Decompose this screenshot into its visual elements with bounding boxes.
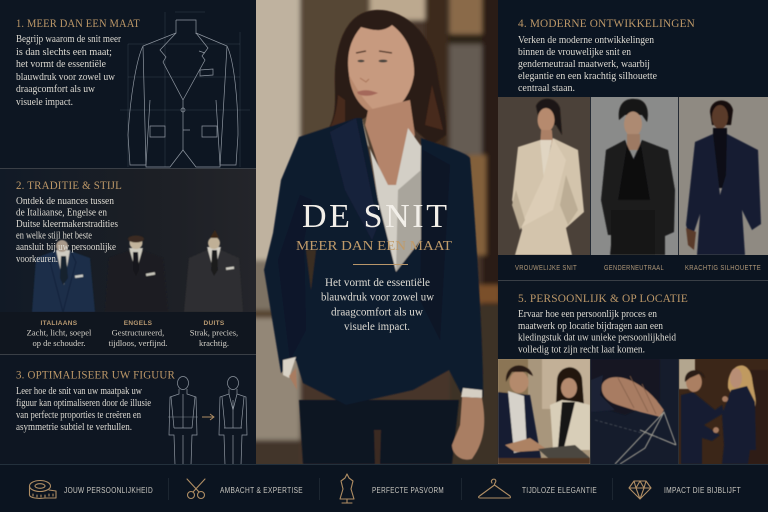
panel: 1 meer dan een maat xyxy=(0,0,256,169)
shirt xyxy=(362,118,421,272)
text block xyxy=(16,33,121,108)
text block: van perfecte proporties te creëren en xyxy=(16,409,141,421)
label: TIJDLOZE ELEGANTIE xyxy=(522,486,597,495)
arrow xyxy=(202,414,214,420)
intro text: blauwdruk voor zowel uw xyxy=(321,290,434,304)
photo background xyxy=(250,0,506,480)
icon: diamond xyxy=(629,481,651,499)
jacket xyxy=(264,118,483,405)
caption: duits xyxy=(190,320,238,348)
icon: hanger xyxy=(479,479,510,498)
text block: volledig tot zijn recht laat komen. xyxy=(518,344,645,356)
panel: 3 optimaliseer uw figuur xyxy=(0,355,256,465)
trousers xyxy=(299,400,459,464)
caption: engels: Gestructureerd, xyxy=(112,328,164,338)
central portrait photo xyxy=(250,0,506,480)
label: JOUW PERSOONLIJKHEID xyxy=(64,486,153,495)
panel: 5 persoonlijk en op locatie xyxy=(498,280,768,464)
caption: italiaans: op de schouder. xyxy=(32,338,86,348)
intro text: visuele impact. xyxy=(344,319,410,333)
caption: italiaans: Zacht, licht, soepel xyxy=(27,328,92,338)
text block: aansluit bij uw persoonlijke xyxy=(16,241,116,253)
text block: draagcomfort als uw xyxy=(16,83,95,95)
suit: italiaans xyxy=(32,240,95,312)
caption: italiaans: ITALIAANS xyxy=(41,320,78,327)
photo caption: VROUWELIJKE SNIT xyxy=(515,265,577,272)
heading: 1. MEER DAN EEN MAAT xyxy=(16,16,140,30)
text block: is dan slechts een maat; xyxy=(16,46,112,58)
suit: engels xyxy=(105,236,168,312)
heading: 4. MODERNE ONTWIKKELINGEN xyxy=(518,16,695,30)
text block: binnen de vrouwelijke snit en xyxy=(518,46,631,58)
caption: engels xyxy=(109,320,167,348)
text block xyxy=(16,385,151,433)
face xyxy=(348,25,414,114)
title: DE SNIT xyxy=(302,198,447,235)
heading: 3. OPTIMALISEER UW FIGUUR xyxy=(16,368,175,382)
text block: blauwdruk voor zowel uw xyxy=(16,71,115,83)
photo: passen op locatie xyxy=(679,359,768,464)
icon: figure before xyxy=(168,376,198,465)
text block: kledingstuk dat uw unieke persoonlijkheid xyxy=(518,332,676,344)
gap between legs xyxy=(374,430,381,464)
subtitle: MEER DAN EEN MAAT xyxy=(296,239,452,254)
text block: en welke stijl het beste xyxy=(16,230,92,242)
text block: het vormt de essentiële xyxy=(16,58,106,70)
photo: vrouwelijke snit xyxy=(498,97,590,255)
text block xyxy=(16,195,118,265)
caption: engels: ENGELS xyxy=(124,320,153,327)
text block: de Italiaanse, Engelse en xyxy=(16,206,107,218)
text block: Begrijp waarom de snit meer xyxy=(16,33,121,45)
text block: genderneutraal maatwerk, waarbij xyxy=(518,58,650,70)
icon: figure after xyxy=(219,376,247,465)
text block: maatwerk op locatie bijdragen aan een xyxy=(518,320,663,332)
text block: elegantie en een krachtig silhouette xyxy=(518,70,657,82)
text block: Ontdek de nuances tussen xyxy=(16,195,114,207)
footer bar xyxy=(0,464,768,512)
text block xyxy=(518,308,676,356)
cuffs and hands xyxy=(283,357,296,378)
text block: Ervaar hoe een persoonlijk proces en xyxy=(518,308,657,320)
panel: 2 traditie en stijl xyxy=(0,169,256,355)
text block: asymmetrie subtiel te verhullen. xyxy=(16,421,132,433)
intro text xyxy=(321,275,434,333)
photo: genderneutraal xyxy=(591,97,678,255)
intro text: draagcomfort als uw xyxy=(331,304,423,318)
icon: scissors xyxy=(187,479,205,498)
text block: Duitse kleermakerstradities xyxy=(16,218,118,230)
heading: 2. TRADITIE & STIJL xyxy=(16,178,122,192)
icon: dress form xyxy=(340,474,354,503)
caption: duits: DUITS xyxy=(204,320,225,327)
photo: persoonlijk gesprek xyxy=(498,359,590,464)
text block xyxy=(518,34,657,94)
photo: handwerk krijtlijnen xyxy=(591,359,678,464)
photo: krachtig silhouette xyxy=(679,97,768,255)
text block: Leer hoe de snit van uw maatpak uw xyxy=(16,385,142,397)
label: PERFECTE PASVORM xyxy=(372,486,444,495)
photo caption: GENDERNEUTRAAL xyxy=(604,265,664,272)
intro text: Het vormt de essentiële xyxy=(325,275,430,289)
text block: visuele impact. xyxy=(16,96,73,108)
icon: tape measure xyxy=(30,480,56,498)
label: IMPACT DIE BIJBLIJFT xyxy=(664,486,741,495)
heading: 5. PERSOONLIJK & OP LOCATIE xyxy=(518,291,688,305)
icon: jacket blueprint sketch xyxy=(120,12,250,167)
caption: italiaans xyxy=(27,320,92,348)
text block: figuur kan optimaliseren door de illusie xyxy=(16,397,151,409)
neck xyxy=(365,100,415,185)
text block: Verken de moderne ontwikkelingen xyxy=(518,34,654,46)
text block: centraal staan. xyxy=(518,82,575,94)
label: AMBACHT & EXPERTISE xyxy=(220,486,303,495)
divider rule xyxy=(353,264,408,265)
hair xyxy=(329,10,446,145)
panel: 4 moderne ontwikkelingen xyxy=(498,20,768,270)
caption: engels: tijdloos, verfijnd. xyxy=(109,338,167,348)
suit: duits xyxy=(184,230,243,312)
caption: duits: Strak, precies, xyxy=(190,328,238,338)
caption: duits: krachtig. xyxy=(199,338,229,348)
text block: voorkeuren. xyxy=(16,253,58,265)
